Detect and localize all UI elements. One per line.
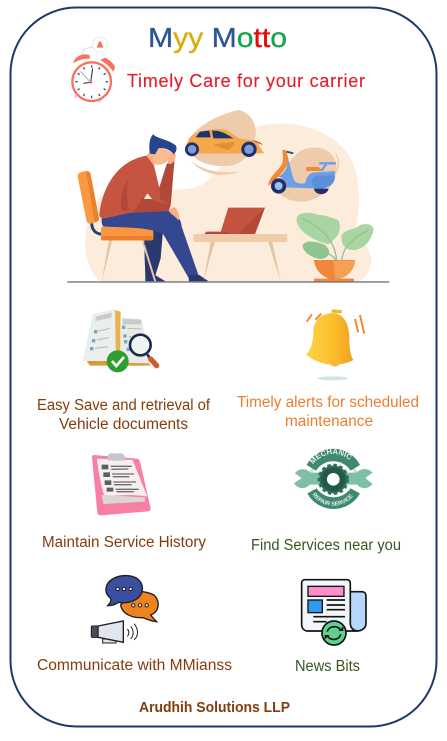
hair [149,134,177,154]
icon: alarm clock [72,37,115,101]
background blob [85,123,371,282]
tagline: Timely Care for your carrier [127,71,365,91]
label: Maintain Service History [42,534,206,551]
label: maintenance [285,413,373,430]
icon: mechanic badge [294,448,372,509]
thought bubble: scooter [268,148,339,202]
feature: communicate [37,576,232,674]
icon: mechanic badge: MECHANIC [310,449,352,464]
icon: newspaper with refresh badge [302,580,366,645]
label: Easy Save and retrieval of [37,397,211,414]
label [37,397,211,433]
hand on knee [169,207,179,220]
icon: clipboard [92,453,151,515]
feature: timely alerts [237,311,419,430]
icon: documents with magnifier and check [83,309,157,372]
title: Myy Motto [148,22,287,53]
man and chair [78,134,209,282]
feature: find services [251,448,401,554]
table and laptop [193,208,287,282]
ground line [67,281,389,283]
illustration: man worried about vehicles [67,110,389,283]
icon: bell [306,311,364,380]
label: Communicate with MMianss [37,657,232,674]
label: Timely alerts for scheduled [237,394,419,411]
feature: save and retrieve documents [37,309,211,433]
feature: service history [42,453,206,551]
chair [78,171,166,282]
neck and face [147,151,160,166]
label: News Bits [295,658,360,675]
label: Vehicle documents [59,416,188,433]
sweater [99,155,175,218]
icon: chat bubbles and megaphone [91,576,158,643]
potted plant [297,213,374,282]
label [237,394,419,430]
feature: news bits [295,580,366,675]
icon: mechanic badge: REPAIR SERVICE [312,492,353,506]
thought bubble: car [185,110,264,175]
footer: company name: Arudhih Solutions LLP [139,699,290,716]
trousers [102,211,199,277]
label: Find Services near you [251,537,401,554]
